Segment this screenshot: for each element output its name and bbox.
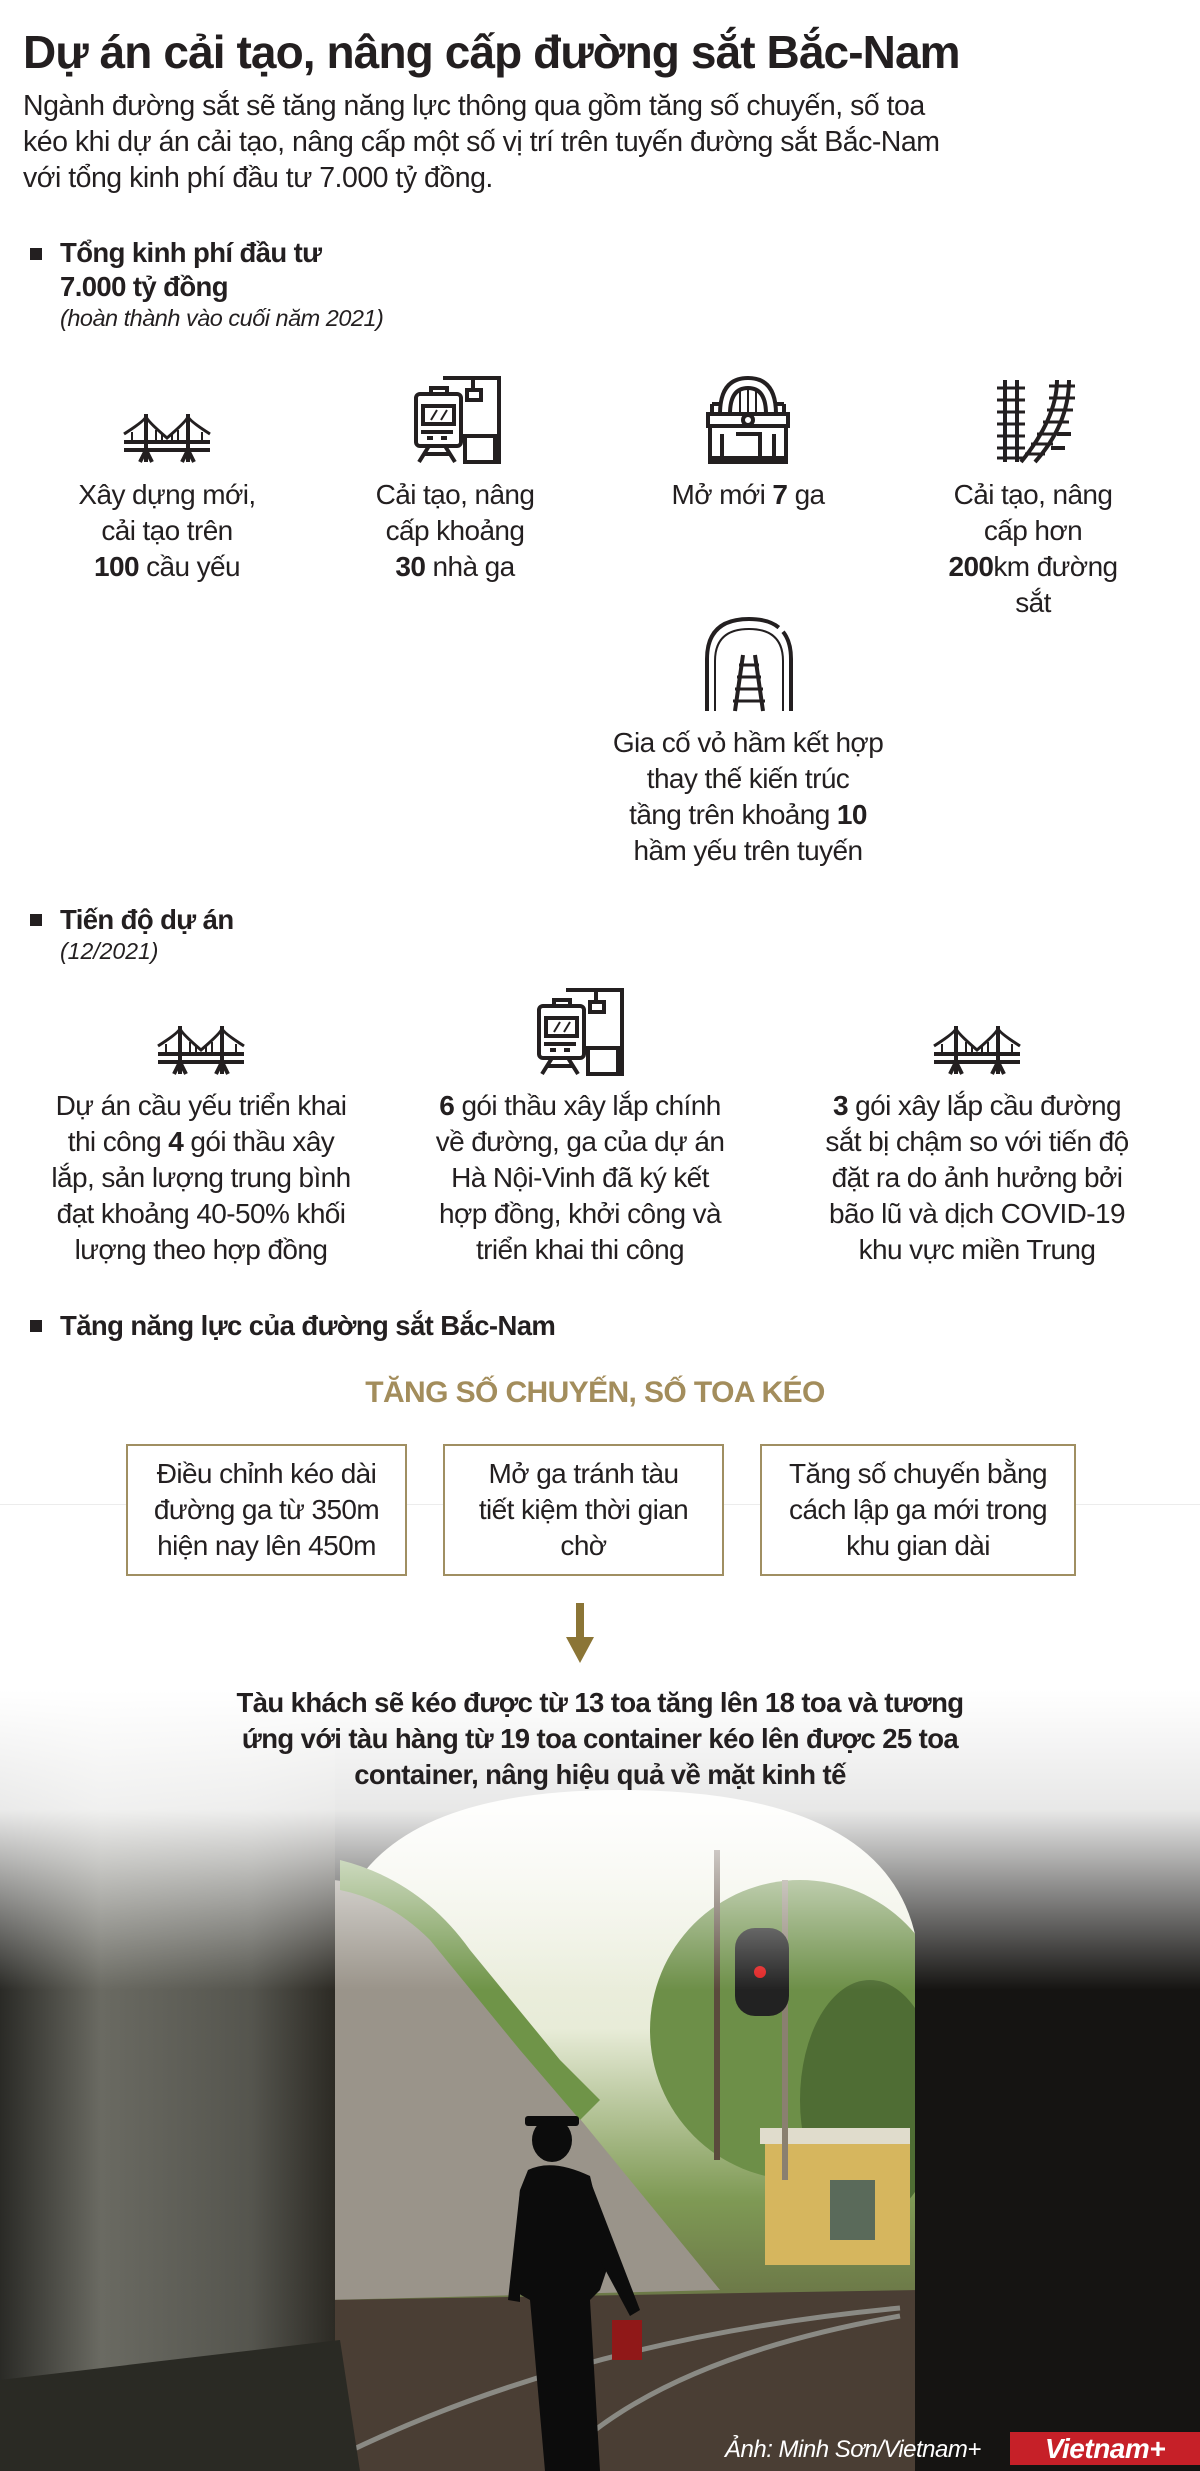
text xyxy=(613,727,883,866)
text: hầm yếu trên tuyến xyxy=(634,835,862,866)
box 1: Điều chỉnh kéo dài xyxy=(157,1458,376,1489)
box 1 xyxy=(126,1444,407,1576)
section heading: tiến độ: Tiến độ dự án xyxy=(60,904,234,935)
text: Hà Nội-Vinh đã ký kết xyxy=(451,1162,709,1193)
text: 100 cầu yếu xyxy=(94,551,240,582)
subheading gold: TĂNG SỐ CHUYẾN, SỐ TOA KÉO xyxy=(365,1376,825,1409)
icon: station building xyxy=(706,376,790,464)
icon: bridge xyxy=(157,1026,245,1075)
photo: tunnel with railway worker xyxy=(0,1731,1200,2471)
text: Xây dựng mới, xyxy=(78,479,256,510)
walls xyxy=(0,1690,335,2471)
text: đạt khoảng 40-50% khối xyxy=(57,1198,345,1229)
box 2: Mở ga tránh tàu xyxy=(489,1458,678,1489)
section heading: tổng kinh phí xyxy=(30,237,383,331)
icon: tracks xyxy=(997,380,1075,464)
house xyxy=(765,2140,910,2265)
box 3: khu gian dài xyxy=(846,1530,990,1561)
progress item 3 xyxy=(825,1026,1129,1265)
intro text: Ngành đường sắt sẽ tăng năng lực thông qua gồm tăng số chuyến, số toa xyxy=(23,90,925,122)
text: 30 nhà ga xyxy=(395,551,515,582)
text xyxy=(436,1090,724,1265)
text: 200km đường xyxy=(948,551,1118,582)
title: Dự án cải tạo, nâng cấp đường sắt Bắc-Nam xyxy=(23,26,960,78)
text xyxy=(948,479,1118,618)
text: lắp, sản lượng trung bình xyxy=(51,1162,351,1193)
item: rail track xyxy=(948,380,1118,618)
ground & rails xyxy=(330,2290,920,2471)
box 2: tiết kiệm thời gian xyxy=(479,1494,688,1525)
text xyxy=(78,479,256,582)
text: 6 gói thầu xây lắp chính xyxy=(439,1090,721,1121)
text: triển khai thi công xyxy=(476,1234,684,1265)
icon: bridge xyxy=(123,414,211,463)
icon: tunnel xyxy=(705,617,793,712)
worker silhouette xyxy=(508,2116,640,2471)
rock slope xyxy=(330,1880,720,2300)
result text: container, nâng hiệu quả về mặt kinh tế xyxy=(354,1759,846,1790)
text: hợp đồng, khởi công và xyxy=(439,1198,721,1229)
text: 3 gói xây lắp cầu đường xyxy=(833,1090,1121,1121)
box 3: Tăng số chuyến bằng xyxy=(789,1458,1047,1489)
opening xyxy=(330,1790,920,2471)
text: cấp hơn xyxy=(984,515,1082,546)
signal xyxy=(714,1850,720,2160)
text: Mở mới 7 ga xyxy=(671,479,825,510)
text: sắt xyxy=(1015,587,1051,618)
trees right xyxy=(650,1880,950,2180)
text: Cải tạo, nâng xyxy=(376,479,534,510)
item: tunnels xyxy=(613,617,883,866)
result text: ứng với tàu hàng từ 19 toa container kéo lên được 25 toa xyxy=(242,1723,958,1754)
icon: train station xyxy=(537,988,624,1076)
text: về đường, ga của dự án xyxy=(436,1126,724,1157)
progress item 2 xyxy=(436,988,724,1265)
box 1: đường ga từ 350m xyxy=(154,1494,379,1525)
section heading: tiến độ xyxy=(30,904,234,964)
text: cấp khoảng xyxy=(386,515,524,546)
icon: bridge xyxy=(933,1026,1021,1075)
icon: train station xyxy=(414,376,501,464)
text: khu vực miền Trung xyxy=(859,1234,1095,1265)
intro text xyxy=(23,90,939,194)
text: bão lũ và dịch COVID-19 xyxy=(829,1198,1125,1229)
text: Dự án cầu yếu triển khai xyxy=(56,1090,346,1121)
item: bridges xyxy=(78,414,256,582)
section heading: tiến độ: (12/2021) xyxy=(60,938,158,964)
text: Cải tạo, nâng xyxy=(954,479,1112,510)
section heading: tăng năng lực: Tăng năng lực của đường sắt Bắc-Nam xyxy=(60,1310,555,1341)
box 2 xyxy=(443,1444,724,1576)
photo credit: Ảnh: Minh Sơn/Vietnam+ xyxy=(725,2436,981,2463)
text: tầng trên khoảng 10 xyxy=(629,799,867,830)
intro text: với tổng kinh phí đầu tư 7.000 tỷ đồng. xyxy=(23,162,493,194)
text: đặt ra do ảnh hưởng bởi xyxy=(832,1162,1122,1193)
text: Gia cố vỏ hầm kết hợp xyxy=(613,727,883,758)
text xyxy=(51,1090,351,1265)
result text xyxy=(236,1687,963,1790)
text: thi công 4 gói thầu xây xyxy=(68,1126,334,1157)
progress item 1 xyxy=(51,1026,351,1265)
section heading: tổng kinh phí: Tổng kinh phí đầu tư xyxy=(60,237,321,268)
box 3: cách lập ga mới trong xyxy=(789,1494,1047,1525)
text: lượng theo hợp đồng xyxy=(75,1234,327,1265)
logo: Vietnam+ xyxy=(1010,2432,1200,2465)
result text: Tàu khách sẽ kéo được từ 13 toa tăng lên 18 toa và tương xyxy=(237,1687,963,1718)
intro text: kéo khi dự án cải tạo, nâng cấp một số vị trí trên tuyến đường sắt Bắc-Nam xyxy=(23,126,939,158)
item: stations xyxy=(376,376,534,582)
text: sắt bị chậm so với tiến độ xyxy=(825,1126,1129,1157)
box 3 xyxy=(760,1444,1076,1576)
section heading: tổng kinh phí: (hoàn thành vào cuối năm 2021) xyxy=(60,305,383,331)
arrow xyxy=(566,1603,594,1663)
text xyxy=(376,479,534,582)
box 2: chờ xyxy=(560,1530,607,1561)
text: thay thế kiến trúc xyxy=(647,763,849,794)
text xyxy=(825,1090,1129,1265)
item: new stations xyxy=(671,376,826,510)
box 1: hiện nay lên 450m xyxy=(157,1530,376,1561)
section heading: tổng kinh phí: 7.000 tỷ đồng xyxy=(60,271,228,302)
text: cải tạo trên xyxy=(101,515,233,546)
logo: Vietnam+: Vietnam+ xyxy=(1045,2433,1165,2464)
